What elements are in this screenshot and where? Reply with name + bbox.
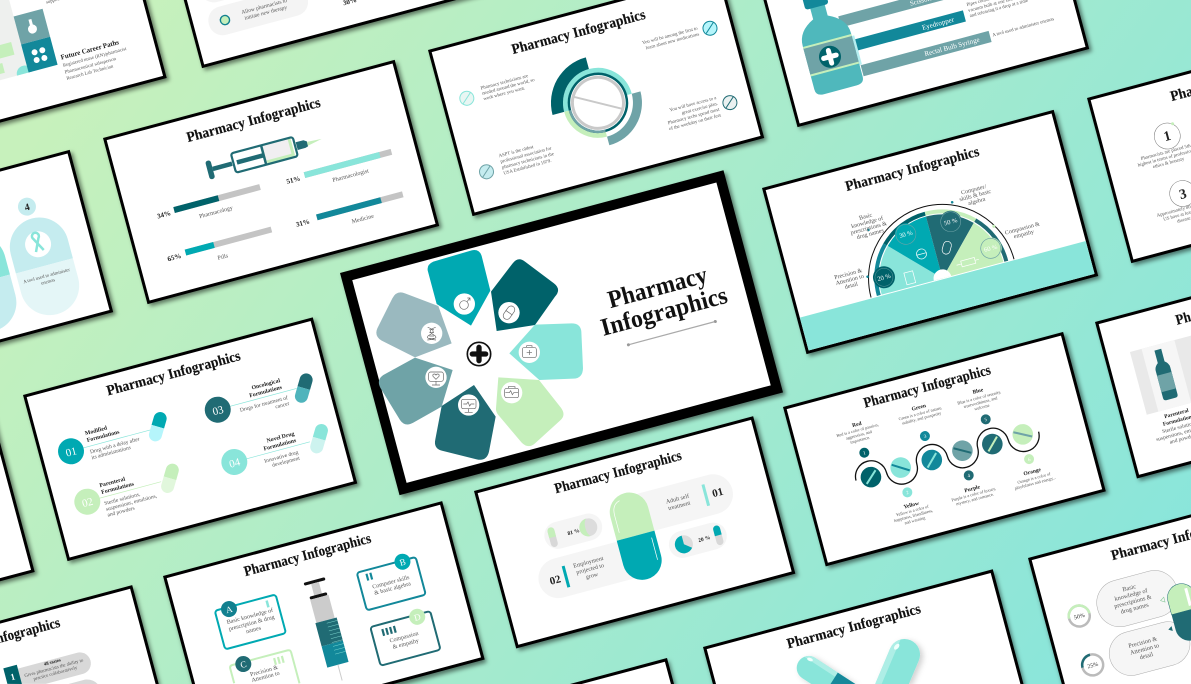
icon: dna: [421, 323, 442, 344]
therapy text: initiate new therapy: [244, 5, 288, 22]
bar: medicine: Medicine: [351, 214, 375, 225]
title: Pharmacy Infographics: [185, 95, 323, 146]
item 03: Drugs for treatment of: [239, 394, 289, 414]
petal 6: [379, 358, 453, 424]
capsule 4: 4: [23, 202, 31, 214]
item: icon and text 1: needed around the world, so: [482, 78, 536, 97]
box D: Compassion: [389, 631, 419, 644]
item 02: Sterile solutions,: [104, 491, 142, 507]
item: icon and text 3: learn about new medications: [646, 32, 700, 51]
large capsule: [605, 488, 666, 584]
item: icon and text 1: work where you want.: [483, 86, 526, 102]
center syringe: [304, 577, 353, 684]
box A: Basic knowledge of: [226, 607, 274, 626]
pill 6 Orange: Orange: [1023, 467, 1042, 477]
petal 2: [491, 259, 558, 331]
item: icon and text 1: Pharmacy technicians are: [480, 74, 529, 92]
panel: formulations slide: [23, 317, 357, 561]
syringe illustration: [205, 130, 324, 180]
value: 20%: 20 %: [877, 273, 892, 283]
item 03: Formulations: [249, 385, 283, 399]
pill 2 Yellow: [879, 452, 935, 528]
capsule 4: [0, 190, 86, 322]
panel: wave slide: [783, 332, 1106, 566]
stat: 20 percent: 20 %: [698, 535, 711, 544]
bar: pharmacology: 34%: [156, 209, 172, 221]
item 1: [1129, 117, 1191, 174]
box A: names: [245, 625, 262, 635]
panel: X capsules slide: [703, 569, 1024, 684]
sector icons: [898, 233, 980, 285]
panel: blank lower-left slide: [0, 406, 35, 650]
capsule 4: A tool used to administer: [23, 268, 71, 285]
option 1: knowledge of: [1114, 587, 1149, 603]
main title: Infographics: [598, 282, 731, 342]
box A: [213, 589, 286, 649]
pill 3 Green: stability, and prosperity: [901, 410, 943, 427]
label: basic knowledge: Basic: [859, 212, 873, 222]
flower diagram: [376, 250, 583, 460]
option 2: Attention to: [1129, 642, 1160, 657]
capsule: [1164, 580, 1191, 644]
panel: semicircle skills slide: [762, 110, 1098, 354]
bar: eyedropper: [851, 0, 1056, 51]
item 01: its administrations: [91, 445, 132, 461]
item 3: 3: [1178, 187, 1188, 203]
pill 6 Orange: playfulness and energy...: [1014, 475, 1056, 491]
pill 3 Green: Green is a color of nature,: [898, 405, 943, 422]
bar: eyedropper: Eyedropper: [921, 15, 955, 32]
pill 6 Orange: [999, 419, 1056, 491]
career list: Pharmaceutical salesperson: [64, 57, 117, 76]
item 3: [1150, 176, 1191, 229]
panel: bottom center slide: [570, 658, 674, 684]
box B: Computer skills: [372, 575, 411, 591]
item 01: [54, 408, 175, 469]
pill 4 Purple: mystery, and romance.: [956, 492, 995, 507]
panel: therapy slide: [158, 0, 494, 68]
item: icon and text 2: pharmacy technicians in the: [502, 152, 555, 171]
panel: main title slide: [340, 170, 783, 495]
stat: 81 percent: [541, 510, 605, 552]
semicircle chart: [852, 188, 1014, 298]
title: Pharmacy Infographics: [844, 144, 981, 195]
icon: capsule: [498, 302, 520, 323]
label: precision: detail: [844, 281, 859, 291]
bar: scissors: [838, 0, 962, 27]
option 2: [1104, 617, 1191, 680]
item: icon and text 4: Pharmacy techs spend most: [667, 108, 721, 126]
pill 2 Yellow: 2: [906, 491, 910, 496]
label: compassion: empathy: [1013, 229, 1035, 240]
box C: [230, 646, 300, 684]
item 3: disease: [1177, 216, 1191, 225]
pill 5 Blue: Blue is a color of serenity,: [957, 389, 1002, 407]
item: icon and text 2: ASPT is the oldest: [498, 145, 535, 159]
box B: [355, 550, 426, 610]
item: icon and text 1: [458, 73, 537, 108]
title: Pharmacy Infographics: [510, 7, 648, 58]
career list: Registered nurse (RN)/pharmacist: [63, 47, 128, 69]
bar: pharmacologist: 51%: [286, 174, 301, 186]
callout: 02: projected to: [576, 563, 605, 576]
icon: bottle: [790, 0, 867, 96]
bar: pharmacology: [156, 184, 264, 231]
pill 2 Yellow: happiness, friendliness,: [893, 508, 934, 524]
panel: syringe ABCD slide: [163, 501, 485, 684]
item: icon and text 4: of the weekday on their feet: [669, 113, 722, 132]
bottle image panel: [1130, 329, 1191, 415]
panel: career paths slide: Future Career Paths: [60, 38, 120, 62]
item: icon and text 4: You will have access to a: [669, 96, 718, 113]
panel: syringe bars slide: [103, 60, 439, 304]
petal 1: [428, 250, 490, 326]
label: precision: Precision &: [834, 268, 863, 281]
pill 5 Blue: welcome: [974, 403, 990, 411]
item 02: and powders: [107, 506, 135, 519]
panel: states slide: [0, 585, 159, 684]
item: icon and text 3: You will be among the first to: [642, 26, 699, 46]
petal 7: [376, 292, 452, 357]
bar: medicine: 31%: [295, 218, 311, 229]
label: compassion: Compassion &: [1004, 221, 1041, 237]
item 04: development: [272, 455, 301, 469]
petal 5: [435, 385, 496, 460]
icon: medical kit: [519, 342, 540, 363]
pill 4 Purple: [937, 435, 998, 508]
box B: & basic algebra: [374, 581, 412, 597]
panel: capsule columns slide: [0, 150, 113, 390]
option 2: Precision &: [1128, 635, 1158, 650]
callout: 01: 01: [711, 486, 725, 500]
icon: monitor: [458, 394, 479, 416]
stat: 20 percent: [666, 520, 730, 561]
pill 6 Orange: Orange is a color of: [1017, 471, 1052, 485]
label: basic knowledge: drug names: [856, 228, 885, 241]
states pill: [3, 652, 91, 684]
item 04: Novel Drug: [266, 431, 295, 444]
box D: D: [413, 611, 422, 623]
option 1: prescriptions &: [1114, 593, 1153, 610]
icon: monitor heart: [425, 367, 447, 388]
box C: Precision &: [250, 665, 279, 678]
ring 50 percent: 50%: [1073, 613, 1086, 621]
pill 4 Purple: Purple is a color of luxury,: [951, 486, 997, 503]
pill 4 Purple: Purple: [964, 484, 981, 494]
item: icon and text 4: great exercise plan.: [681, 102, 719, 116]
label: computer: algebra: [968, 197, 987, 207]
value: 60%: 60 %: [983, 244, 999, 254]
box A: prescription & drug: [228, 615, 275, 633]
bar: pharmacology: Pharmacology: [199, 205, 234, 220]
pill 5 Blue: trustworthiness, and: [963, 395, 999, 410]
panel: bottle slide: [753, 0, 1089, 127]
pill 1 Red: 1: [863, 451, 867, 457]
box B: B: [398, 557, 407, 568]
label: computer: skills & basic: [959, 189, 992, 203]
panel: bottle formulation slide: [1095, 247, 1191, 478]
option 1: [1092, 565, 1183, 632]
label: computer: Computer/: [961, 184, 987, 196]
title: Pharmacy Infographics: [242, 531, 373, 580]
item: icon and text 2: USA Established in 1979.: [503, 159, 552, 177]
item 01: Formulations: [86, 429, 121, 444]
value: 50%: 50 %: [943, 217, 959, 227]
icon: center cross: [467, 342, 491, 366]
label: basic knowledge: knowledge of: [850, 215, 884, 230]
pill 5 Blue: [955, 383, 1016, 460]
bar: pharmacologist: Pharmacologist: [332, 168, 370, 184]
bar: pills: Pills: [217, 253, 230, 262]
item 01: Drug with a delay after: [89, 435, 140, 455]
title: Pharmacy Infographics: [785, 601, 923, 652]
pill 6 Orange: 6: [1028, 458, 1032, 463]
item 04: [217, 420, 336, 481]
states pill: 1: [9, 671, 17, 682]
states pill: Gives pharmacists the ability to: [24, 658, 85, 679]
item: icon and text 2: professional association for: [500, 146, 553, 165]
bar: rectal bulb syringe: [861, 14, 1056, 76]
pill 1 Red: aggression, and: [845, 429, 873, 442]
panel: outlined options slide: [1028, 480, 1191, 684]
states pill: practice collaboratively: [33, 666, 79, 682]
value: 30%: 30 %: [899, 230, 914, 240]
item 03: [201, 369, 321, 430]
value: 50%: [937, 208, 964, 235]
item 03: Oncological: [251, 378, 281, 391]
box D: [369, 605, 441, 666]
item: icon and text 3: [641, 20, 719, 53]
ring 50 percent: [1066, 603, 1092, 629]
pill 5 Blue: Blue: [972, 387, 985, 396]
callout: 01: treatment: [668, 500, 692, 512]
bar: pills: 65%: [167, 252, 182, 263]
bar: medicine: [295, 191, 407, 239]
item 02: Formulations: [101, 481, 135, 496]
title: Pharmacy Infographics: [553, 448, 684, 497]
value: 20%: [870, 264, 897, 291]
value: 60%: [977, 235, 1004, 262]
pill 1 Red: Red: [852, 421, 862, 429]
box D: & empathy: [392, 638, 420, 651]
label: precision: Attention to: [835, 274, 865, 287]
callout: 01: Adult self: [665, 493, 690, 506]
item 1: 1: [1162, 129, 1173, 145]
box C: C: [239, 659, 248, 670]
stat: 81 percent: 81 %: [567, 528, 580, 537]
item 04: 04: [228, 456, 242, 471]
item: icon and text 4: [664, 91, 740, 132]
title underline: [627, 320, 717, 347]
item: icon and text 2: [476, 140, 556, 183]
callout: 02: grow: [585, 572, 599, 581]
bottom band: [800, 241, 1095, 350]
title: Pharmacy Infographics: [862, 362, 993, 412]
panel: pill donut slide: [428, 0, 764, 216]
option 1: Basic: [1122, 583, 1137, 593]
option 1: drug names: [1120, 601, 1150, 616]
main title: Pharmacy: [605, 261, 711, 314]
ring 25 percent: 25%: [1087, 662, 1099, 670]
states pill: 48 states: [43, 658, 62, 668]
capsule 4: enemas: [41, 278, 56, 287]
pill 2 Yellow: and warning: [904, 515, 927, 525]
petal 3: [509, 323, 583, 380]
box C: Attention to: [251, 671, 280, 684]
bar: rectal bulb syringe: Rectal Bulb Syringe: [924, 36, 980, 58]
wave line: [852, 416, 1043, 496]
career list: Research Lab Technician: [66, 64, 115, 82]
item 02: Parenteral: [99, 476, 126, 489]
label: basic knowledge: prescriptions &: [850, 221, 888, 236]
pill 5 Blue: 5: [984, 418, 988, 423]
capsule 3: [0, 228, 23, 339]
capsule right: [875, 639, 920, 684]
ring 25 percent: [1080, 652, 1106, 678]
second pill: [68, 680, 98, 684]
item 04: Formulations: [263, 438, 298, 452]
value: 30%: [892, 221, 919, 248]
pill 3 Green: [896, 399, 957, 475]
capsule left: [797, 656, 855, 684]
callout: 02: [534, 535, 652, 603]
pill 1 Red: Red is a color of passion,: [836, 422, 879, 439]
item 04: Innovative drug: [264, 450, 299, 465]
icon: gender: [454, 293, 475, 315]
pill 1 Red: importance.: [850, 435, 871, 445]
icon: case: [501, 382, 522, 403]
item 01: 01: [64, 445, 78, 460]
panel: capsule comparison slide: [474, 416, 795, 648]
item 01: Modified: [84, 425, 109, 437]
petal 4: [496, 377, 564, 446]
panel: numbered circles slide: [1087, 20, 1191, 263]
option 2: detail: [1139, 651, 1154, 661]
item 1: ethics & honesty: [1153, 157, 1186, 170]
item 03: cancer: [275, 401, 290, 410]
pill 2 Yellow: Yellow: [903, 501, 920, 511]
item 02: [70, 459, 189, 526]
formulation text: Parenteral: [1164, 408, 1190, 420]
box A: A: [225, 604, 234, 615]
item 1: Pharmacists are placed 5th: [1140, 144, 1191, 162]
title: Pharmacy Infographics: [105, 348, 243, 399]
pill 3 Green: 3: [923, 434, 928, 440]
item 02: suspensions, emulsions,: [105, 493, 158, 513]
pill 1 Red: [834, 417, 894, 493]
bar: rectal bulb syringe: A tool used to administer enemas: [992, 17, 1055, 38]
callout: 02: Employment: [573, 556, 605, 570]
callout: 01: [621, 470, 737, 537]
pill 2 Yellow: Yellow is a color of: [895, 504, 930, 517]
pill 4 Purple: 4: [967, 474, 971, 479]
bar: pharmacologist: [285, 149, 396, 195]
item 03: 03: [211, 404, 225, 418]
pill 3 Green: Green: [911, 403, 927, 413]
panel: career paths slide: [0, 0, 167, 156]
bar: pills: [166, 227, 276, 274]
item 02: 02: [81, 496, 95, 510]
donut pill chart: [540, 46, 652, 157]
callout: 02: 02: [548, 573, 563, 588]
